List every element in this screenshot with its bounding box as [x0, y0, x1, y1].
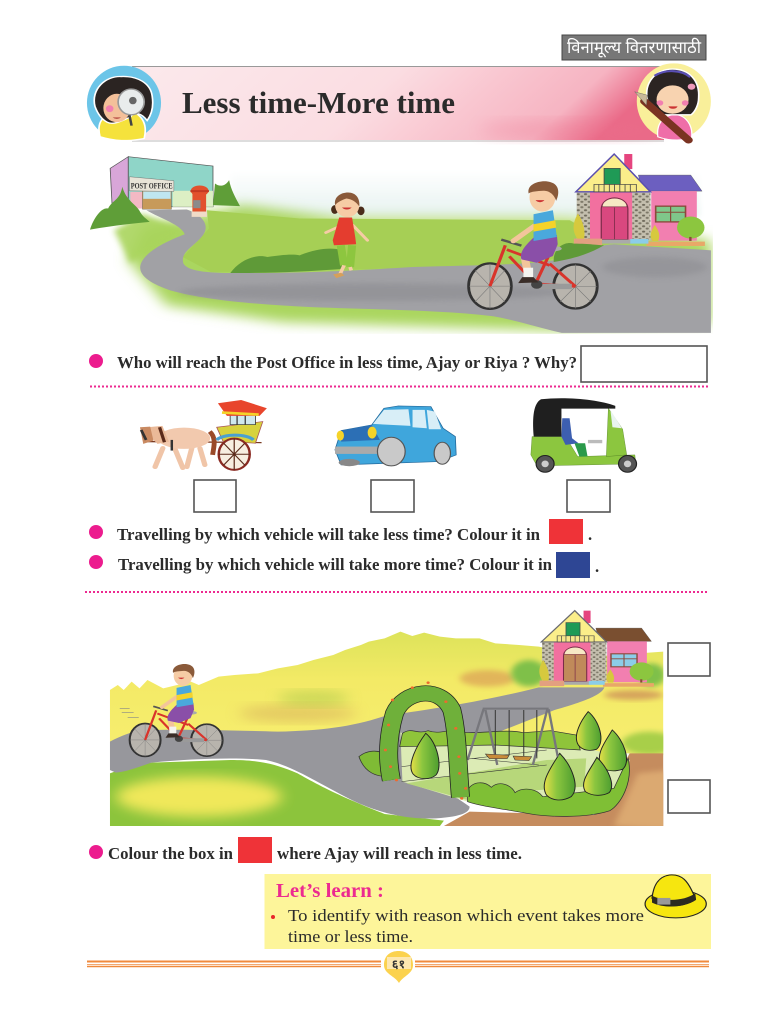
sky — [233, 186, 700, 218]
green meadow — [110, 760, 444, 826]
boy Ajay on bicycle — [130, 664, 223, 756]
question: less time vehicle: . — [588, 525, 592, 544]
instruction: colour the box: where Ajay will reach in less time. — [277, 844, 522, 863]
girl Riya — [326, 192, 367, 278]
answer box — [581, 346, 707, 382]
question: less time vehicle — [89, 519, 592, 544]
question: more time vehicle: . — [595, 557, 599, 576]
post office sign: POST OFFICE — [131, 181, 173, 191]
illustration: Ajay riding to house past park — [110, 611, 677, 830]
yellow grass — [110, 632, 663, 755]
bush by house — [554, 243, 604, 262]
icon: girl with magnifying glass — [87, 66, 161, 141]
icon: yellow hat — [645, 875, 706, 918]
road — [110, 687, 604, 819]
heading: Let’s learn : — [276, 880, 384, 902]
trees — [411, 712, 627, 800]
destination boxes — [668, 643, 710, 813]
house — [539, 611, 654, 687]
illustration: Ajay and Riya on road to post office — [90, 154, 711, 333]
swing — [468, 709, 558, 765]
post office sign — [130, 177, 174, 191]
horse carriage — [140, 400, 267, 470]
question: more time vehicle — [89, 552, 599, 578]
instruction: colour the box — [89, 837, 522, 863]
bushes — [90, 187, 150, 230]
house — [574, 154, 705, 246]
road — [140, 210, 711, 333]
car — [335, 406, 456, 466]
speed lines — [120, 708, 139, 717]
learning point — [271, 906, 644, 946]
question: post office: Who will reach the Post Office in less time, Ajay or Riya ? Why? — [117, 353, 577, 372]
front hedge — [468, 758, 629, 816]
answer boxes for vehicles — [194, 480, 610, 512]
title banner — [87, 63, 711, 142]
grass — [114, 205, 711, 331]
arch — [384, 681, 467, 800]
boy Ajay on bicycle — [469, 181, 597, 309]
page number balloon: ६१ — [392, 957, 405, 971]
vehicles row — [140, 398, 637, 472]
post box — [190, 185, 209, 217]
learning point: time or less time. — [288, 927, 413, 946]
post office — [90, 157, 240, 230]
question: post office — [89, 346, 707, 382]
page number balloon — [384, 951, 413, 983]
header badge: विनामूल्य वितरणासाठी — [567, 37, 702, 59]
learning point: To identify with reason which event takes more — [288, 906, 644, 925]
auto rickshaw — [531, 398, 637, 472]
icon: girl with paintbrush — [635, 63, 711, 140]
brown ground — [444, 753, 663, 826]
question: less time vehicle: Travelling by which vehicle will take less time? Colour it in — [117, 525, 540, 544]
bushes by road — [230, 249, 344, 273]
footer rule — [87, 962, 709, 966]
title: Less time-More time — [182, 85, 455, 120]
park — [359, 681, 630, 817]
instruction: colour the box: Colour the box in — [108, 844, 233, 863]
panel: Let's learn — [264, 874, 711, 949]
question: more time vehicle: Travelling by which vehicle will take more time? Colour it in — [118, 555, 552, 574]
